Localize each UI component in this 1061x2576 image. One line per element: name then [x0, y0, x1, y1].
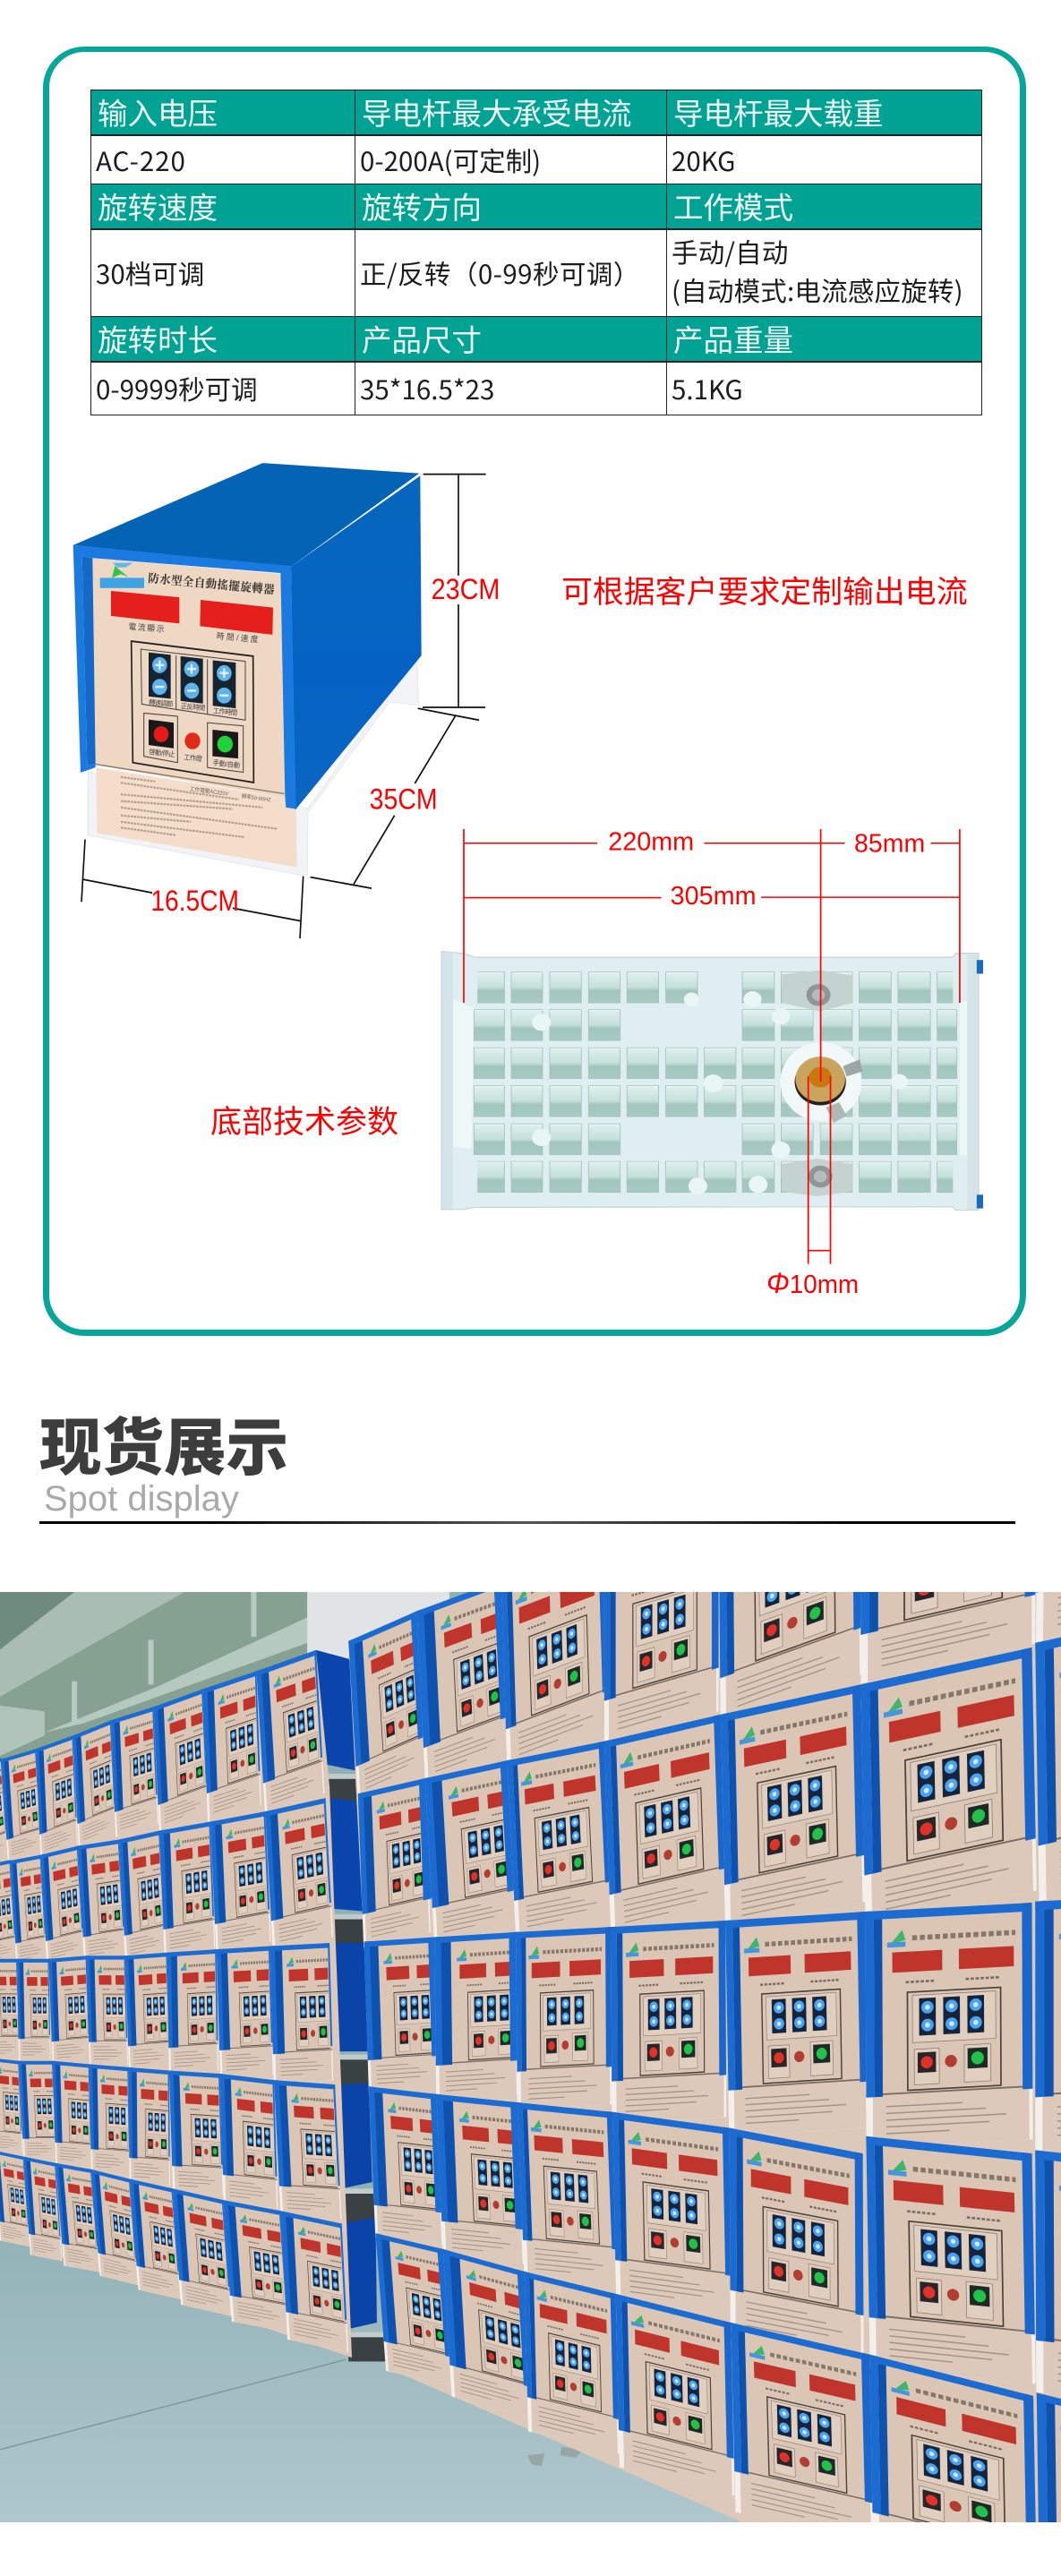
product description lines: 頻率50-60HZ — [241, 792, 271, 804]
table value row 2 — [90, 230, 982, 316]
table value row 2: (自动模式:电流感应旋转) — [672, 271, 963, 309]
blue front frame — [73, 545, 296, 809]
right wall of stacked units — [348, 1372, 1061, 2576]
dimension: 305mm: 305mm — [671, 881, 757, 910]
plate grid cells — [470, 970, 958, 1194]
work lamp — [184, 732, 203, 763]
table header row 3 — [90, 316, 982, 363]
table value row 3 — [90, 363, 982, 415]
table value row 2: 手动/自动 — [672, 233, 789, 270]
manual auto button — [208, 723, 244, 772]
work lamp: 工作燈 — [184, 752, 203, 763]
dimension: shaft diameter 10mm: Φ10mm — [766, 1268, 859, 1300]
table value row 2: 30档可调 — [96, 254, 204, 292]
table value row 3: 5.1KG — [672, 370, 743, 407]
dimension: depth 35CM: 35CM — [370, 783, 438, 816]
dimension: 85mm — [854, 829, 960, 1003]
start stop button — [144, 713, 177, 763]
dimension: depth 35CM — [311, 708, 479, 888]
product figure with dimensions — [73, 463, 500, 938]
heading rule — [39, 1521, 1015, 1524]
table value row 2: 正/反转（0-99秒可调） — [360, 254, 640, 292]
dimension: height 23CM: 23CM — [432, 573, 500, 605]
dimension: 85mm: 85mm — [854, 829, 925, 858]
display captions — [128, 621, 259, 645]
adjust buttons: 轉速調節 — [149, 697, 174, 708]
dimension: height 23CM — [423, 475, 500, 707]
blue box side face — [291, 475, 422, 809]
white base of the box — [88, 655, 418, 876]
table value row 3: 35*16.5*23 — [360, 370, 494, 407]
section subtitle: Spot display: Spot display — [44, 1479, 239, 1519]
display captions: 電流顯示 — [128, 621, 165, 634]
table value row 3: 0-9999秒可调 — [96, 370, 258, 407]
control panel face — [92, 558, 286, 798]
adjust buttons: 工作時間 — [212, 706, 238, 717]
photo: stacked stock of units — [0, 1592, 1061, 2522]
spec table — [90, 90, 982, 415]
logo — [100, 563, 144, 588]
time display — [200, 600, 273, 635]
table header row 2 — [90, 184, 982, 230]
device title: 防水型全自動搖擺旋轉器 — [148, 569, 276, 597]
ceiling and white column — [0, 1592, 449, 1796]
left wall end faces — [316, 1650, 389, 2361]
plastic bosses — [532, 991, 908, 1194]
manual auto button: 手動/自動 — [212, 757, 241, 770]
current display — [111, 591, 179, 623]
bottom plate figure with dimensions — [441, 827, 983, 1300]
table value row 1: AC-220 — [96, 141, 186, 179]
product description lines — [96, 765, 284, 837]
table header row 2: 旋转速度 — [98, 183, 218, 227]
metal bracket and bolt: bottom — [782, 1159, 852, 1196]
table header row 2: 工作模式 — [673, 183, 793, 227]
start stop button: 啓動/停止 — [149, 747, 175, 759]
floor — [0, 1592, 1061, 2522]
dimension: 220mm: 220mm — [608, 827, 694, 856]
dimension: shaft diameter 10mm — [766, 1076, 859, 1300]
display captions: 時間/速度 — [216, 630, 259, 645]
table header row 1: 导电杆最大承受电流 — [362, 90, 632, 133]
product description lines: 工作電壓AC220V — [189, 785, 229, 798]
table value row 1: 0-200A(可定制) — [360, 141, 541, 179]
left wall of stacked units — [0, 1647, 355, 2358]
table header row 3: 旋转时长 — [98, 315, 218, 360]
adjust buttons: 正反時間 — [180, 701, 206, 713]
table value row 1 — [90, 136, 982, 184]
button frame — [132, 641, 253, 783]
blue box top face — [73, 463, 419, 567]
table header row 1 — [90, 90, 982, 136]
dimension: 220mm — [464, 827, 845, 1082]
table value row 1: 20KG — [672, 141, 735, 179]
callout: bottom technical parameters: 底部技术参数 — [210, 1097, 398, 1143]
plate body — [441, 952, 979, 1211]
table header row 3: 产品重量 — [673, 315, 793, 360]
blue corner clips — [977, 960, 983, 1209]
section heading: 现货展示: 现货展示 — [39, 1398, 288, 1488]
panel: technical parameters frame — [43, 47, 1026, 1336]
dimension: width 16.5CM: 16.5CM — [150, 885, 239, 917]
table header row 3: 产品尺寸 — [362, 315, 482, 360]
table header row 1: 导电杆最大载重 — [673, 90, 883, 133]
table header row 1: 输入电压 — [98, 90, 218, 133]
metal bracket and bolt: top — [782, 971, 852, 1012]
dimension: width 16.5CM — [81, 840, 304, 938]
brass shaft bushing — [781, 1042, 862, 1123]
callout: customisable output current: 可根据客户要求定制输出电流 — [561, 568, 968, 612]
adjust buttons — [141, 649, 245, 720]
table header row 2: 旋转方向 — [362, 183, 482, 227]
